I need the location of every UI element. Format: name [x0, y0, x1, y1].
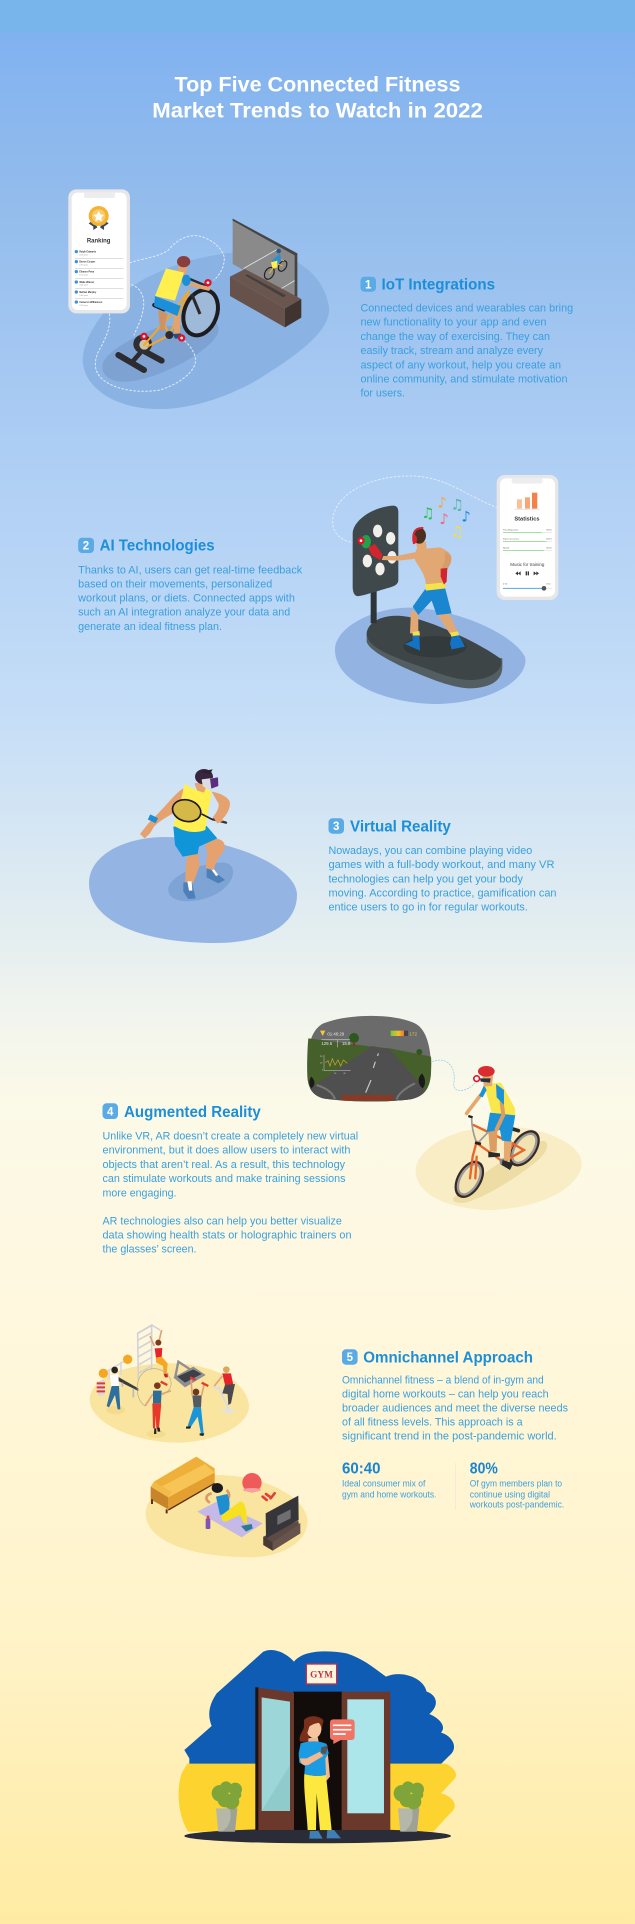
heading 4: Augmented Reality: [124, 1104, 261, 1121]
phone: statistics: Impact accuracy: [503, 538, 520, 541]
section 3 text: [328, 818, 557, 913]
phone: ranking: Ranking: [87, 239, 111, 245]
phone: statistics: Music for training: [510, 562, 545, 567]
bike frame and wheel: [133, 278, 224, 353]
gym sign: GYM: [310, 1670, 333, 1680]
body 2: based on their movements, personalized: [78, 578, 272, 590]
body 3: technologies can help you get your body: [328, 873, 524, 885]
illustration: gym entrance with woman: [179, 1650, 456, 1843]
doorway: [293, 1692, 343, 1830]
phone: ranking: 1680 point: [79, 284, 88, 287]
AR glasses view: 15.8: [342, 1041, 351, 1046]
illustration: AR cycling: [307, 1016, 582, 1210]
heading 1: IoT Integrations: [382, 276, 495, 293]
body 1: change the way of exercising. They can: [360, 331, 550, 343]
player: [140, 769, 233, 901]
background blob: [335, 608, 525, 704]
phone: ranking: Ralph Edwards: [79, 251, 97, 253]
music notes: ♫: [450, 524, 463, 541]
bike base: [118, 350, 162, 370]
dashed connection: [433, 1060, 475, 1091]
body 3: games with a full-body workout, and many VR: [328, 859, 555, 871]
phone: ranking: 1800 point: [79, 254, 88, 257]
stat: 80%: continue using digital: [470, 1489, 550, 1499]
body 4: AR technologies also can help you better visualize: [102, 1215, 342, 1227]
badge 1: [360, 277, 376, 292]
right door: [342, 1692, 390, 1830]
phone: ranking: 1470 point: [79, 304, 88, 307]
background blob: [89, 837, 297, 943]
heading 3: Virtual Reality: [350, 819, 451, 836]
wall bars: [138, 1325, 160, 1380]
yoga mat: [197, 1502, 263, 1537]
illustration: VR tennis player: [89, 769, 297, 943]
stat: 80%: Of gym members plan to: [470, 1479, 562, 1489]
exercise ball: [242, 1473, 262, 1492]
woman with dumbbells: [186, 1377, 208, 1436]
body 3: moving. According to practice, gamification can: [328, 887, 557, 899]
section 5 text: [342, 1349, 568, 1510]
dashed connection lines: [95, 236, 224, 391]
bench and barbell: [97, 1355, 138, 1397]
woman with phone: [299, 1716, 341, 1839]
heading 5: Omnichannel Approach: [363, 1349, 533, 1366]
floor shadow: [168, 863, 233, 901]
body 1: aspect of any workout, help you create an: [360, 359, 561, 371]
body 4: data showing health stats or holographic trainers on: [102, 1230, 352, 1242]
badge 5: 5: [347, 1352, 354, 1364]
treadmill: [173, 1362, 206, 1387]
music notes: [421, 494, 471, 541]
left plant: [212, 1781, 242, 1832]
badge 4: [102, 1103, 118, 1119]
water bottle: [206, 1516, 210, 1529]
title: Market Trends to Watch in 2022: [152, 98, 483, 122]
phone: ranking: 1750 point: [79, 274, 88, 277]
body 2: such an AI integration analyze your data and: [78, 607, 290, 619]
AR glasses view: 20: [343, 1073, 346, 1075]
woman on exercise bike: [213, 1366, 237, 1414]
stat: 80%: 80%: [470, 1460, 498, 1477]
music notes: ♪: [437, 494, 447, 511]
body 4: the glasses’ screen.: [102, 1244, 196, 1256]
badge 5: [342, 1349, 358, 1365]
AR glasses view: [307, 1016, 431, 1101]
phone: statistics: 00:10: [546, 539, 553, 541]
right plant: [394, 1781, 424, 1832]
AR glasses view: 129.5: [321, 1041, 333, 1046]
rider: [154, 256, 208, 339]
body 5: broader audiences and meet the diverse needs: [342, 1403, 568, 1415]
TV stand: [263, 1496, 300, 1551]
body 1: Connected devices and wearables can bring: [360, 303, 573, 315]
yellow background shape: [179, 1764, 456, 1832]
body 2: [77, 564, 303, 633]
phone: statistics: [497, 475, 558, 600]
badge 3: [328, 818, 344, 834]
body 4: environment, but it does allow users to interact with: [102, 1145, 351, 1157]
background blob: [83, 251, 329, 409]
phone: ranking: Wade Warren: [79, 282, 95, 284]
body 2: workout plans, or diets. Connected apps with: [77, 593, 295, 605]
body 1: [360, 303, 573, 399]
phone: statistics: Statistics: [514, 517, 540, 523]
stat: 80%: [469, 1460, 564, 1510]
dashed connection: [333, 476, 497, 543]
hanging woman: [150, 1330, 168, 1377]
illustration: home workout: [146, 1457, 308, 1557]
phone: statistics: 00:10: [546, 548, 553, 550]
stat: 60:40: 60:40: [342, 1460, 380, 1477]
illustration: smart boxing machine: [333, 475, 558, 704]
phone: ranking: Cameron Williamson: [79, 302, 103, 304]
body 5: Omnichannel fitness – a blend of in-gym and: [342, 1374, 544, 1386]
music notes: ♪: [439, 511, 449, 528]
man with white shirt: [106, 1367, 125, 1414]
cyclist: [467, 1066, 515, 1170]
phone: ranking: Nathan Murphy: [79, 291, 97, 294]
body 5: [342, 1374, 568, 1443]
bike shadow: [453, 1141, 547, 1203]
AR glasses view: 20: [320, 1056, 323, 1058]
stat: 80%: workouts post-pandemic.: [469, 1500, 564, 1510]
AR glasses view: 0: [322, 1069, 324, 1071]
body 4: more engaging.: [102, 1187, 176, 1199]
body 2: Thanks to AI, users can get real-time feedback: [78, 564, 303, 576]
phone: ranking: 1480 point: [79, 294, 88, 297]
body 4: Unlike VR, AR doesn’t create a completely new virtual: [102, 1131, 358, 1143]
stat: 60:40: Ideal consumer mix of: [342, 1479, 426, 1489]
body 3: [328, 845, 557, 913]
badge 2: [78, 538, 94, 553]
badge 2: 2: [83, 540, 89, 552]
bicycle: [450, 1116, 544, 1201]
illustration: indoor cycling with IoT sensors: [68, 189, 329, 409]
body 3: Nowadays, you can combine playing video: [328, 845, 532, 857]
stat: 60:40: [342, 1460, 436, 1499]
phone: statistics: 00:10: [546, 530, 553, 532]
title: Top Five Connected Fitness: [174, 73, 461, 97]
AR glasses view: 10: [320, 1063, 323, 1065]
body 3: entice users to go in for regular workouts.: [328, 901, 528, 913]
body 1: online community, and stimulate motivation: [360, 373, 568, 385]
illustration: gym workouts: [90, 1325, 249, 1443]
bike shadow: [102, 323, 219, 382]
open left door: [255, 1687, 294, 1830]
phone: statistics: 0:10: [546, 584, 551, 586]
sensor dots: [140, 279, 212, 342]
figure: [140, 769, 230, 899]
top band: [0, 0, 635, 32]
blue background shape: [184, 1650, 454, 1764]
background blob: [146, 1475, 308, 1557]
body 4: [102, 1131, 358, 1256]
TV and cabinet: [230, 219, 301, 327]
woman doing sit-ups: [206, 1483, 253, 1532]
body 4: objects that aren’t real. As a result, this technology: [102, 1159, 346, 1171]
body 1: new functionality to your app and even: [360, 317, 547, 329]
heading 2: AI Technologies: [100, 538, 215, 555]
speech bubble: [330, 1719, 355, 1744]
gym sign: [306, 1664, 337, 1684]
badge 4: 4: [107, 1106, 114, 1118]
AR glasses view: 10: [334, 1073, 337, 1075]
sofa: [151, 1457, 215, 1513]
badge 3: 3: [333, 821, 339, 833]
badge 1: 1: [365, 280, 372, 292]
body 1: for users.: [360, 387, 405, 399]
phone: statistics: Punching power: [503, 529, 519, 532]
AR glasses view: 01:46:29: [327, 1031, 345, 1036]
section 1 text: [360, 276, 573, 399]
title: [152, 73, 483, 122]
phone: ranking: Devon Cooper: [79, 262, 95, 264]
music notes: ♫: [421, 505, 434, 522]
phone: statistics: Speed: [503, 548, 510, 550]
phone: ranking: Eleanor Pena: [79, 272, 95, 274]
body 5: of all fitness levels. This approach is a: [342, 1417, 523, 1429]
section 2 text: [77, 538, 303, 633]
music notes: ♫: [451, 496, 464, 513]
phone: ranking: 1760 point: [79, 264, 88, 267]
ground: [184, 1829, 451, 1843]
phone: statistics: 0:10: [503, 584, 508, 586]
boxer: [368, 528, 465, 651]
body 5: digital home workouts – can help you reach: [342, 1388, 549, 1400]
punch board: [353, 506, 398, 623]
body 5: significant trend in the post-pandemic world.: [342, 1431, 557, 1443]
woman with jump rope: [137, 1369, 171, 1438]
dumbbells: [263, 1493, 275, 1500]
body 1: easily track, stream and analyze every: [360, 345, 544, 357]
body 4: can stimulate workouts and make training sessions: [102, 1173, 346, 1185]
body 2: generate an ideal fitness plan.: [78, 621, 222, 633]
platform: [367, 616, 502, 688]
background blob: [416, 1127, 582, 1210]
AR glasses view: 172: [409, 1031, 418, 1036]
stat: 60:40: gym and home workouts.: [342, 1489, 436, 1499]
music notes: ♪: [461, 508, 471, 525]
phone: ranking: [68, 189, 130, 313]
background blob: [90, 1363, 249, 1443]
section 4 text: [102, 1103, 358, 1256]
